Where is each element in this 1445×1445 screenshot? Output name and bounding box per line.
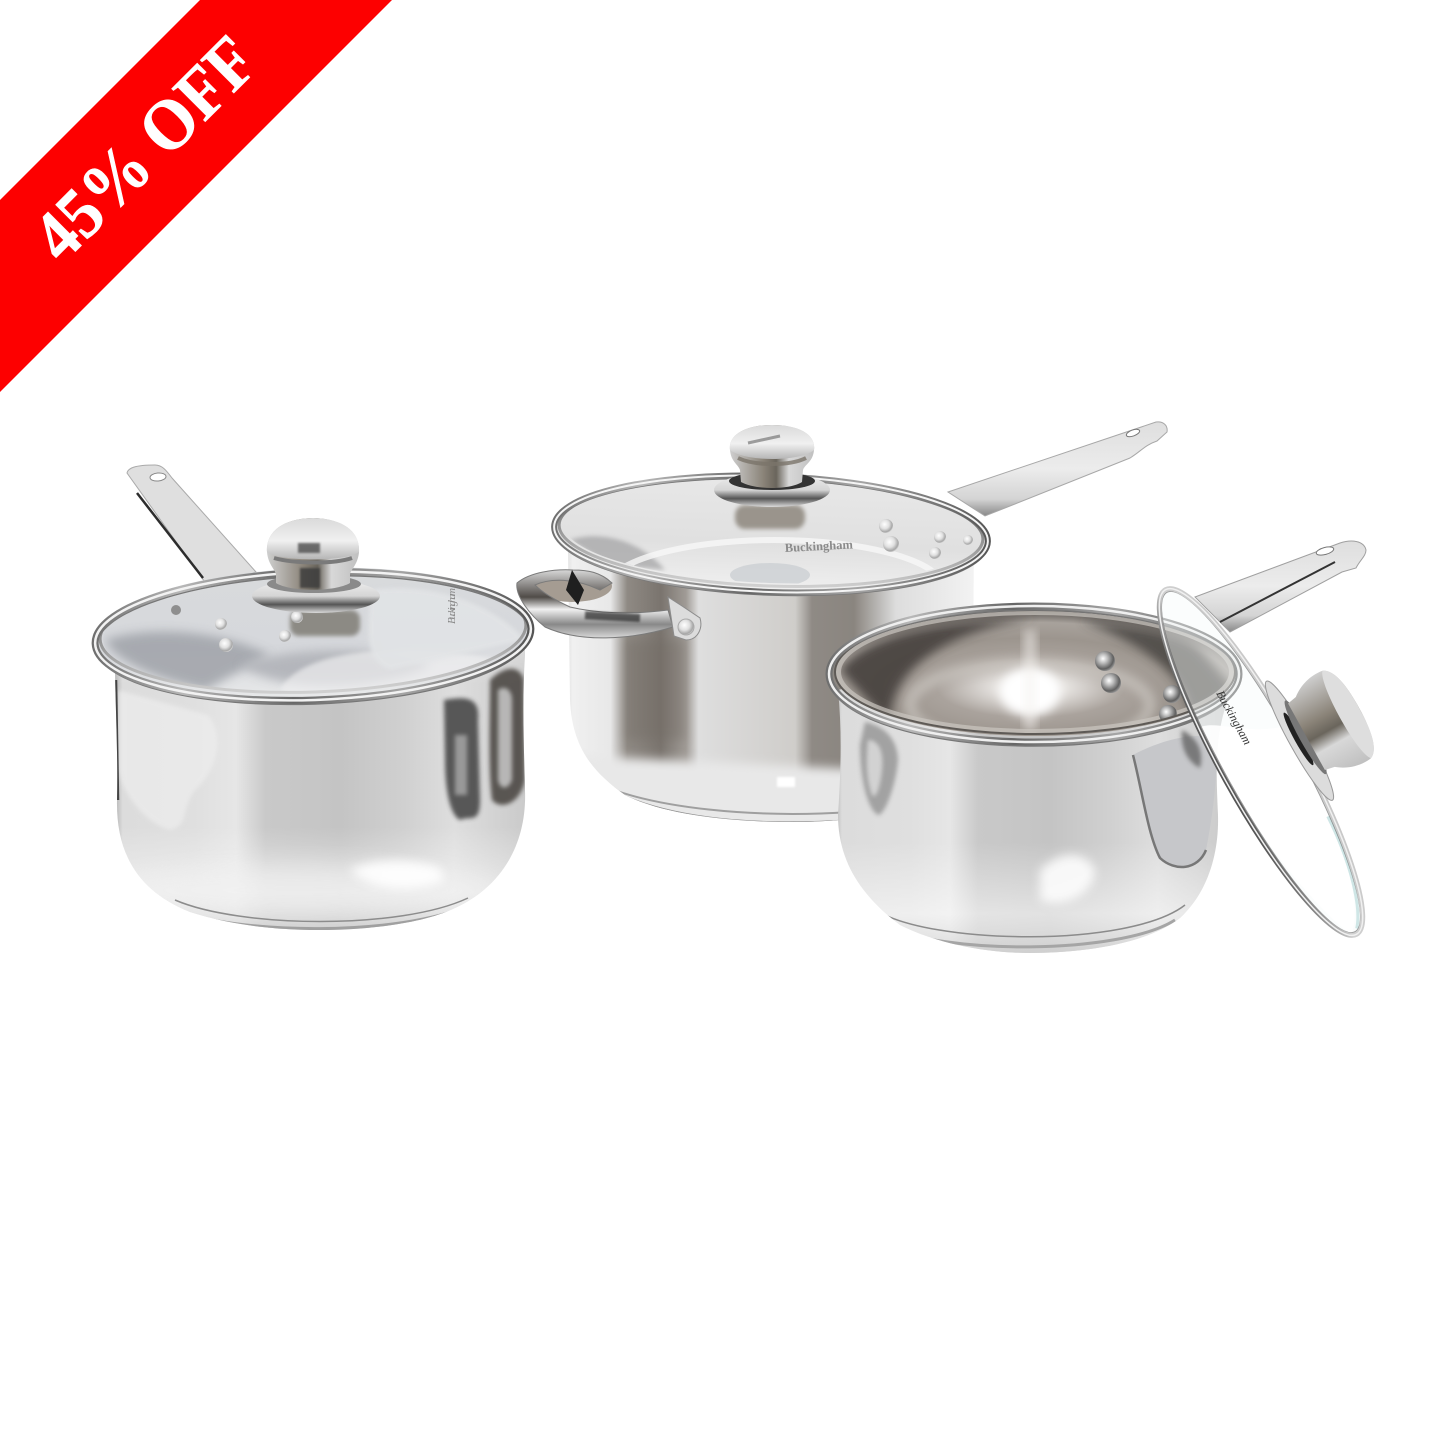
banner text: 45% OFF: 45% OFF <box>17 20 273 276</box>
middle pan glass lid <box>551 472 991 596</box>
left lid vent holes <box>171 605 303 652</box>
loop side handle with rivet <box>517 570 701 640</box>
reflections on left pan body <box>118 690 217 830</box>
steam vent holes <box>879 519 973 559</box>
brand mark on right lid: Buckingham <box>1213 688 1255 747</box>
right pan handle <box>1195 541 1366 632</box>
right pan interior <box>829 606 1239 747</box>
right lid knob <box>1258 648 1392 805</box>
product photo: saucepan set with discount banner <box>0 0 1374 953</box>
right glass lid leaning on pan <box>1131 535 1445 954</box>
left saucepan with lid <box>93 465 533 935</box>
brand mark on left lid: Buckingham <box>446 588 458 624</box>
long handle of middle pan <box>948 422 1167 516</box>
left pan body <box>100 650 530 935</box>
middle pan body <box>568 552 974 822</box>
left pan glass lid <box>93 560 533 712</box>
right saucepan, open <box>829 541 1366 960</box>
right pan body <box>838 689 1230 953</box>
middle saucepan with lid and loop handle <box>517 422 1167 830</box>
interior rivets <box>1095 651 1181 723</box>
left lid knob <box>252 518 380 613</box>
brand mark on middle lid: Buckingham <box>784 537 854 555</box>
middle lid knob <box>714 425 830 507</box>
discount banner <box>0 0 392 392</box>
left pan handle <box>127 465 256 585</box>
